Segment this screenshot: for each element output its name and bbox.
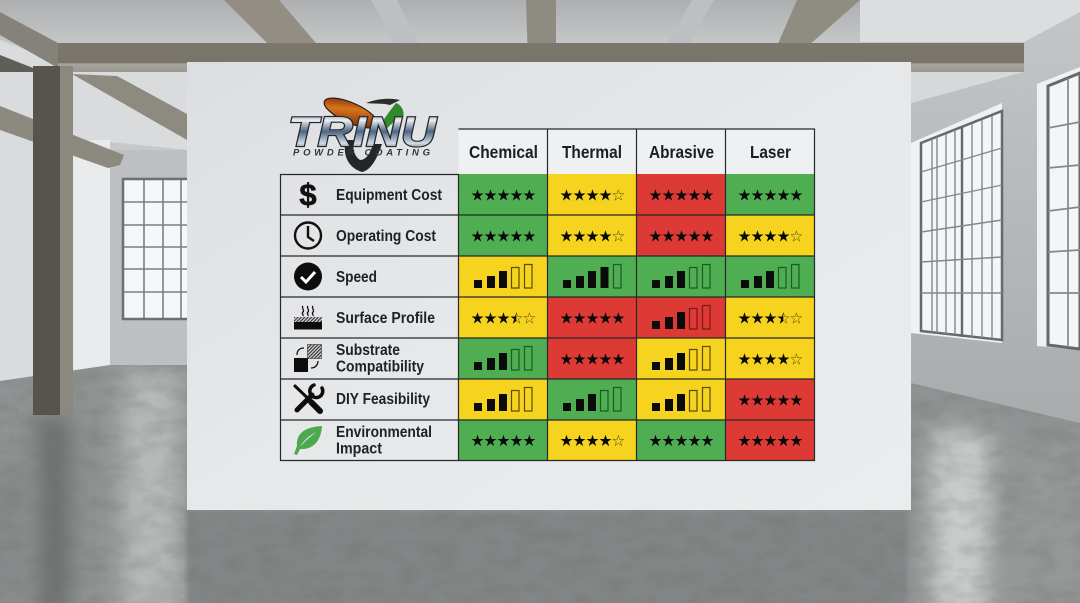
icon: dollar sign: $ [299,177,317,212]
label: DIY Feasibility: DIY Feasibility [336,391,430,408]
row: Operating Cost: ★★★★★ [470,228,535,246]
row: Operating Cost: ★★★★☆ [560,228,624,246]
icon: substrate squares [294,344,322,372]
icon: check circle [294,262,322,290]
row: Operating Cost: ★★★★★ [648,228,713,246]
row: Environmental Impact: ★★★★★ [738,432,802,450]
icon: surface heat [294,306,322,330]
row: Equipment Cost: ★★★★★ [470,186,535,204]
right window 2 [1037,67,1080,350]
label: Environmental Impact: Environmental [336,424,432,441]
logo: TriNu Powder Coating: TRINU [288,108,438,155]
row: Operating Cost: ★★★★☆ [738,228,802,246]
column header: Chemical: Chemical [469,142,538,162]
row: Environmental Impact [294,420,814,460]
column header: Laser: Laser [750,142,791,162]
row: Environmental Impact: ★★★★★ [648,432,713,450]
label: Substrate Compatibility: Substrate [336,342,400,359]
row: Operating Cost [295,215,814,256]
label: Environmental Impact [336,424,432,458]
panel: display wall [187,62,911,510]
row: Environmental Impact: ★★★★★ [470,432,535,450]
icon: green leaf [294,426,322,455]
logo: TriNu Powder Coating [288,92,438,172]
row: Equipment Cost: ★★★★★ [738,186,802,204]
row: Equipment Cost: ★★★★★ [648,186,713,204]
label: Environmental Impact: Impact [336,440,382,458]
label: Surface Profile: Surface Profile [336,310,435,327]
row: Environmental Impact: ★★★★☆ [560,432,624,450]
row: Substrate Compatibility: ★★★★☆ [738,350,802,368]
row: Surface Profile: ★★★★★ [560,310,624,328]
logo: TriNu Powder Coating: POWDER COATING [293,148,431,158]
row: Surface Profile [294,297,814,338]
header row [458,129,814,174]
icon: wrench and screwdriver [295,385,323,411]
label: Operating Cost: Operating Cost [336,228,436,245]
comparison table [280,129,814,460]
label: Substrate Compatibility [336,342,424,376]
logo: TriNu Powder Coating: TRINU [288,108,438,155]
row: DIY Feasibility [295,379,814,420]
label: Speed: Speed [336,269,377,286]
row: Speed [294,256,814,297]
row: Surface Profile: ★★★☆☆ [738,310,802,328]
row: Substrate Compatibility [294,338,814,379]
right window 1 [911,103,1002,343]
row: Surface Profile: ★★★★★ [470,310,535,328]
icon: clock [295,222,321,248]
left back window [123,179,189,319]
column header: Thermal: Thermal [562,142,622,162]
label: Substrate Compatibility: Compatibility [336,358,424,376]
row: Surface Profile: ★★★☆☆ [470,310,535,328]
row: DIY Feasibility: ★★★★★ [738,392,802,410]
floor [0,360,1080,603]
row: Substrate Compatibility: ★★★★★ [560,350,624,368]
row: Equipment Cost: ★★★★☆ [560,186,624,204]
row: Surface Profile: ★★★★★ [738,310,802,328]
column [33,66,60,415]
column header: Abrasive: Abrasive [649,142,714,162]
row: Equipment Cost [299,174,814,215]
label: Equipment Cost: Equipment Cost [336,187,442,204]
ceiling beams [224,0,316,62]
